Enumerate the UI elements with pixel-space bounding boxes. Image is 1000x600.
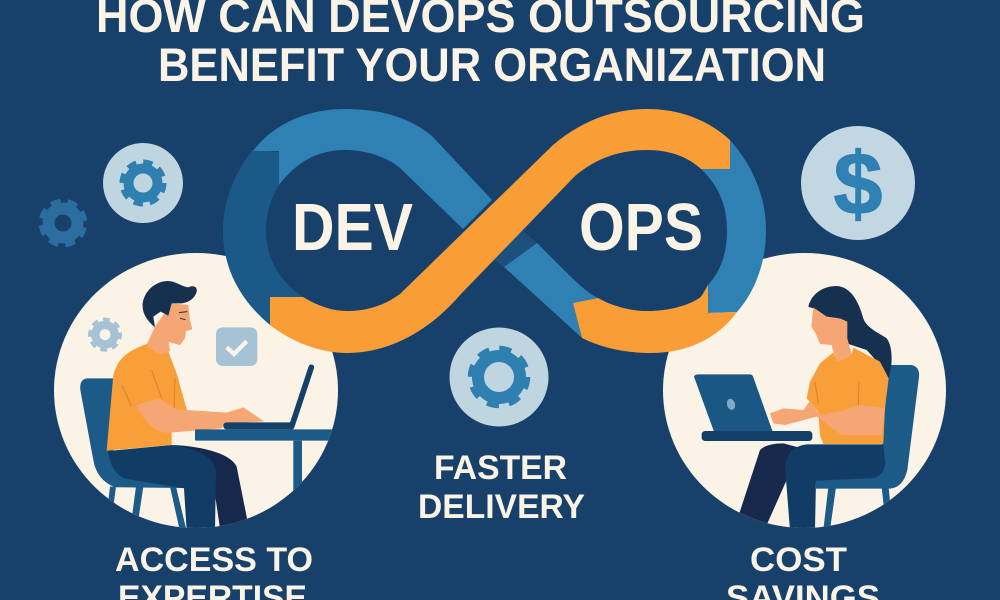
chair [816,365,919,530]
right loop lower orange arc [573,285,737,353]
person: eye and brow [179,312,187,320]
person: hair ear lock [809,307,840,318]
laptop [223,367,311,429]
person: shirt [107,344,187,451]
icon: check badge [216,327,257,366]
title: BENEFIT YOUR ORGANIZATION [158,38,826,91]
person: hair behind [808,286,892,379]
laptop base [702,431,812,441]
right loop light arc [701,140,766,313]
label: cost savings [726,541,880,600]
panel: access to expertise illustration [54,253,338,530]
person: shirt folds [122,370,175,412]
person: hair [143,281,197,327]
person: back leg [173,445,247,528]
label: access to expertise [115,541,313,600]
chair [80,378,186,528]
main orange band [270,109,730,353]
panel: cost savings illustration [663,253,947,530]
person: back leg [740,443,798,524]
left loop dark arc [223,150,303,325]
label: access to expertise: ACCESS TO [115,541,313,579]
person: arm [770,401,885,435]
label: cost savings: COST [750,541,847,579]
person: front leg [108,445,216,530]
laptop [694,374,773,432]
loop label: DEV: DEV [292,190,413,265]
icon: small gear [88,318,122,351]
icon: dollar badge: $ [834,134,882,233]
icon: gear badge centre [450,328,548,426]
person: arm [136,398,264,433]
title [96,0,865,91]
icon: gear badge top left [103,143,183,223]
lower right diagonal [504,243,598,338]
person: shirt folds [815,382,859,407]
person: head and neck [147,303,192,354]
label: faster delivery: FASTER [434,449,567,487]
infinity loop [223,109,766,353]
crossing shadow [492,230,537,267]
person: shirt [807,348,889,444]
person: front leg [785,444,885,530]
label: faster delivery: DELIVERY [418,488,585,526]
icon: dollar badge [801,126,915,240]
left loop light arc [253,109,492,229]
icon: loose gear left [37,197,89,249]
person: head and neck [811,307,852,361]
loop label: OPS: OPS [579,190,703,265]
label: faster delivery [418,449,585,526]
table [195,429,332,490]
